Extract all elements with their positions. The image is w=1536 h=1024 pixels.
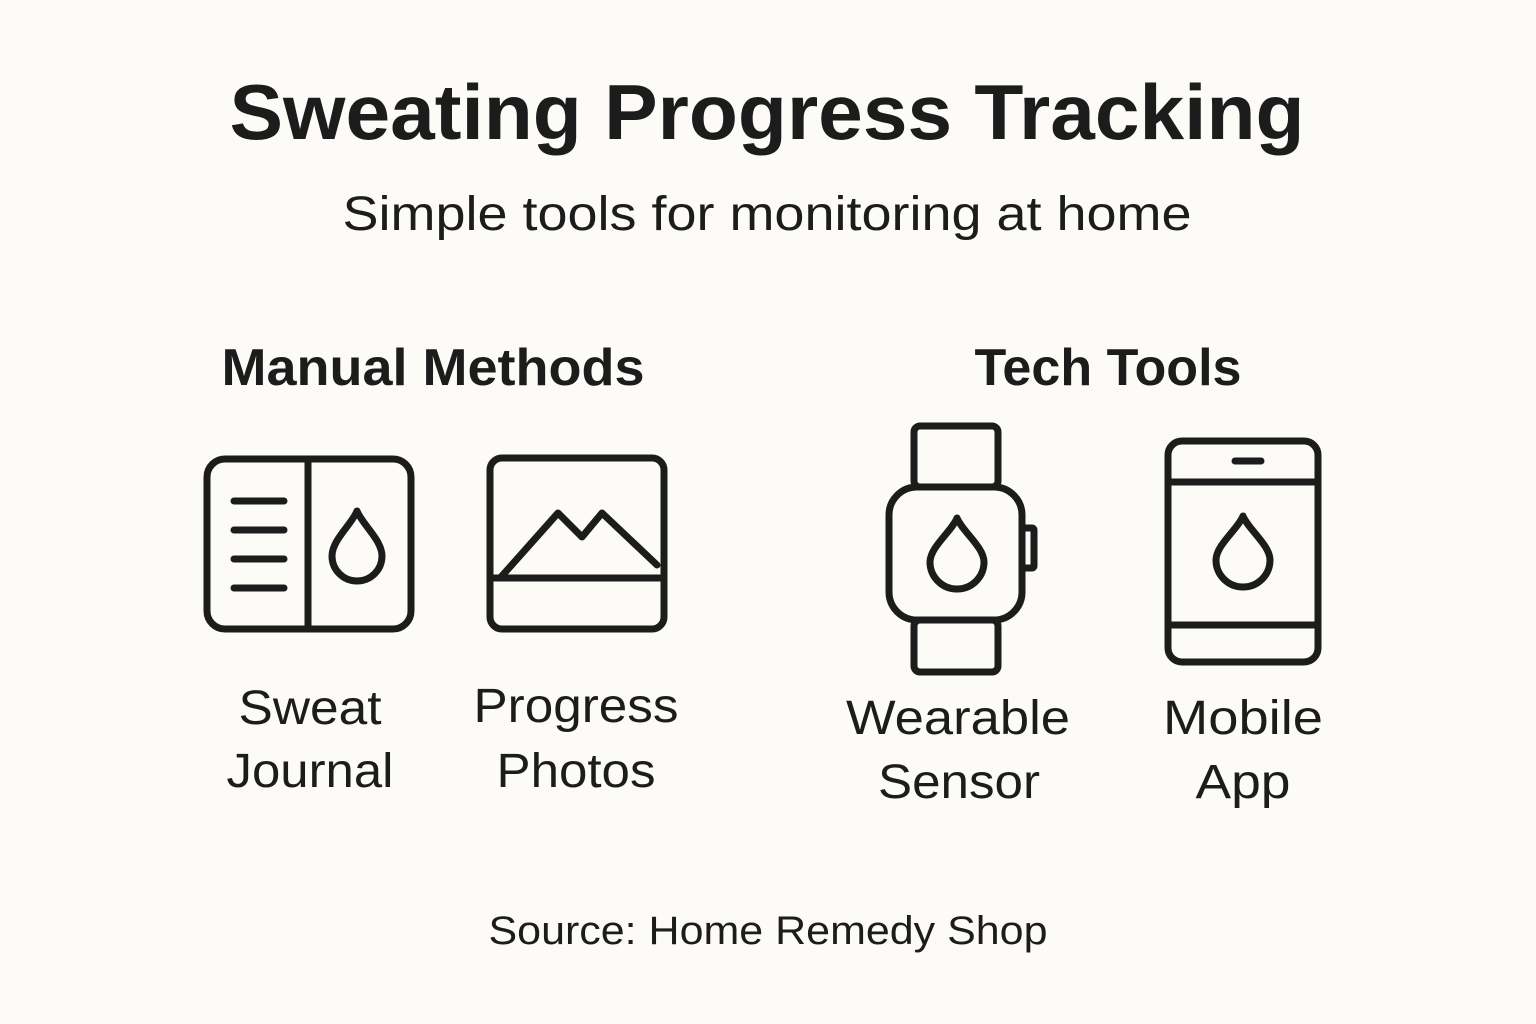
label: progress photos: Photos — [496, 745, 656, 798]
label: wearable sensor — [846, 692, 1070, 809]
label: wearable sensor: Wearable — [846, 692, 1070, 745]
title: Sweating Progress Tracking — [230, 68, 1304, 156]
heading: tech tools: Tech Tools — [974, 339, 1242, 397]
subtitle: Simple tools for monitoring at home — [342, 188, 1192, 241]
icon: mobile app — [1168, 441, 1318, 662]
label: mobile app: App — [1196, 756, 1290, 809]
heading: manual methods: Manual Methods — [222, 339, 644, 397]
source: Source: Home Remedy Shop — [488, 909, 1048, 953]
icon: progress photos — [490, 458, 664, 629]
icon: sweat journal — [207, 459, 411, 629]
label: sweat journal: Sweat — [238, 682, 382, 735]
label: mobile app: Mobile — [1163, 692, 1323, 745]
label: progress photos — [474, 680, 678, 798]
label: wearable sensor: Sensor — [878, 756, 1040, 809]
icon: wearable sensor — [889, 426, 1034, 672]
label: sweat journal: Journal — [226, 745, 394, 798]
label: sweat journal — [226, 682, 394, 798]
label: progress photos: Progress — [474, 680, 678, 733]
label: mobile app — [1163, 692, 1323, 809]
